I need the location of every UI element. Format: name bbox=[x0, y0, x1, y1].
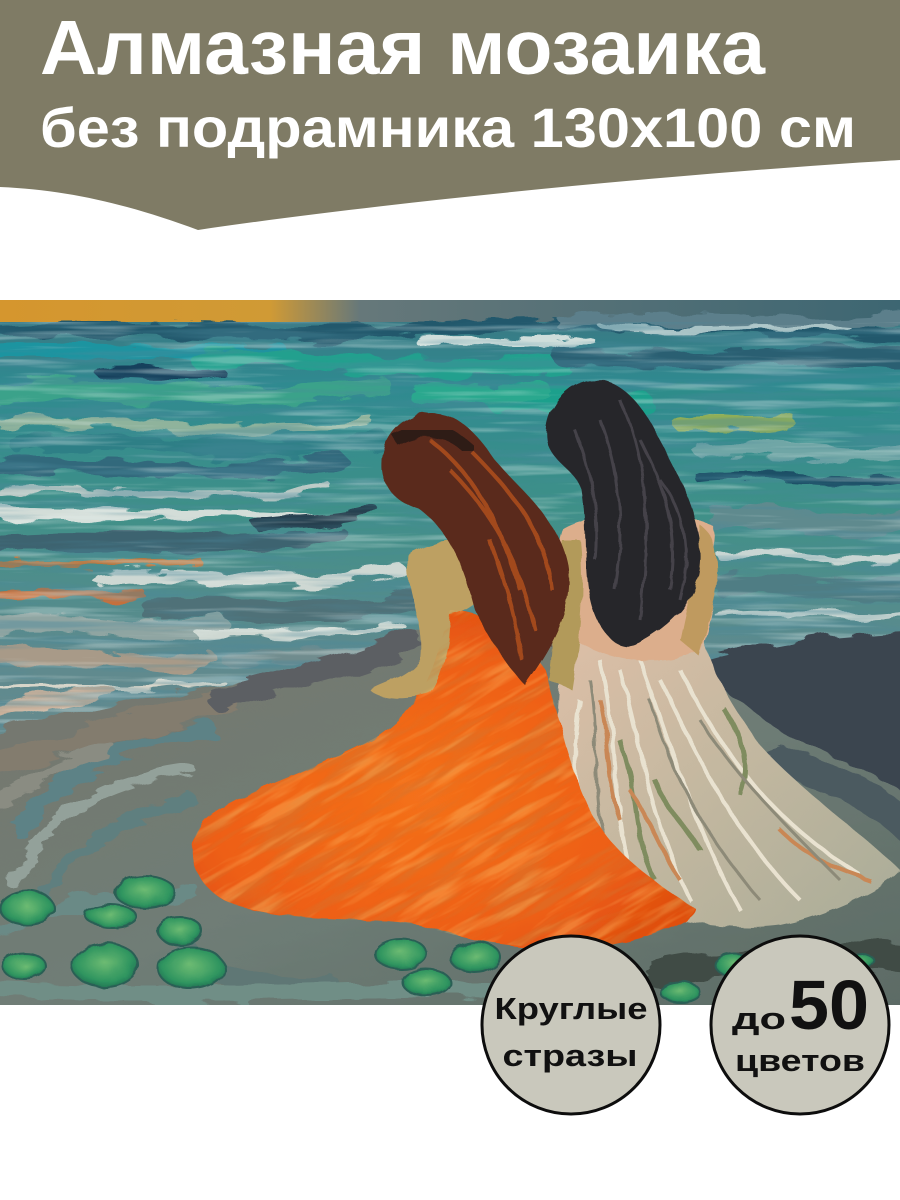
hair left bbox=[382, 413, 569, 685]
header banner bbox=[0, 0, 900, 230]
hair right bbox=[546, 380, 701, 646]
lily pad cluster centre bbox=[375, 939, 875, 1002]
badge: up to 50 colours: до bbox=[732, 1001, 786, 1036]
subtitle: без подрамника 130х100 см bbox=[40, 96, 856, 159]
badge: up to 50 colours bbox=[711, 936, 889, 1114]
shore bbox=[0, 630, 900, 1020]
badge: up to 50 colours: цветов bbox=[735, 1043, 865, 1078]
lily pads bbox=[0, 876, 875, 1002]
painting: two women on the shore bbox=[0, 300, 900, 1005]
badge: round rhinestones bbox=[482, 936, 660, 1114]
lily pad cluster left bbox=[0, 876, 224, 989]
sea bbox=[0, 300, 900, 734]
skin bbox=[370, 540, 474, 699]
badge: round rhinestones: стразы bbox=[502, 1038, 638, 1073]
title: Алмазная мозаика bbox=[40, 5, 766, 91]
badge: up to 50 colours: 50 bbox=[789, 966, 869, 1044]
woman right: light dress bbox=[543, 514, 900, 927]
skin bbox=[558, 514, 716, 661]
woman left: orange dress bbox=[192, 540, 696, 948]
badge: round rhinestones: Круглые bbox=[494, 991, 648, 1026]
